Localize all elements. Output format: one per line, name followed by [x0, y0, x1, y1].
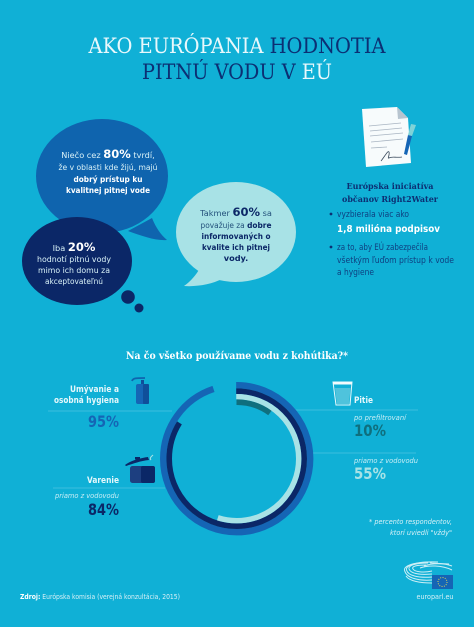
speech bubble: 20%: hodnotí pitnú vody [37, 254, 111, 264]
ring: drinking filtered 10% [180, 402, 293, 515]
speech bubble: 60%: informovaných o [202, 231, 271, 241]
text block: Right2Water bullets: vyzbierala viac ako [337, 209, 409, 219]
icon: glass of water [333, 382, 352, 405]
footnote: * percento respondentov, [369, 517, 452, 526]
speech bubble: 60%: Takmer 60% sa [199, 205, 272, 219]
footnote: ktorí uviedli "vždy" [390, 528, 452, 537]
logo: European Parliament [404, 562, 453, 589]
speech bubble: 20%: Iba 20% [53, 240, 96, 254]
chart heading: Na čo všetko používame vodu z kohútika?* [126, 351, 349, 362]
text block: Right2Water bullets: za to, aby EÚ zabezpečila [337, 241, 428, 252]
ring: washing 95% [163, 385, 310, 532]
speech bubble: 60%: vody. [224, 253, 248, 263]
flag [432, 575, 453, 589]
label: filtered 10% [353, 413, 407, 440]
label: washing: Umývanie a [70, 385, 119, 395]
label: tap 55%: priamo z vodovodu [353, 456, 418, 465]
label: washing [54, 385, 119, 431]
ring: cooking 84% [169, 391, 304, 526]
icon: cooking pot [125, 455, 155, 483]
icon: signed document and pen [362, 107, 416, 167]
speech bubble: 80%: kvalitnej pitnej vode [66, 185, 150, 195]
label: cooking [54, 476, 119, 519]
speech bubble: 20% [22, 217, 144, 312]
label: cooking: priamo z vodovodu [54, 491, 119, 500]
speech bubble: 80%: Niečo cez 80% tvrdí, [61, 147, 155, 161]
title: PITNÚ VODU V EÚ [142, 59, 332, 84]
website: europarl.eu [416, 593, 454, 601]
ring: drinking tap 55% [175, 397, 299, 521]
text block: Right2Water bullets [330, 209, 454, 277]
speech bubble: 60% [176, 182, 296, 286]
footnote [369, 517, 452, 537]
heading: Right2Water: občanov Right2Water [342, 194, 438, 205]
label: washing: 95% [88, 412, 119, 431]
text block: Right2Water bullets: 1,8 milióna podpisov [337, 223, 440, 235]
text block: Right2Water bullets: a hygiene [337, 267, 374, 277]
speech bubble: 80%: dobrý prístup ku [74, 174, 143, 184]
title: AKO EURÓPANIA HODNOTIA [88, 33, 386, 58]
title [88, 33, 386, 84]
speech bubble: 60%: považuje za dobre [200, 220, 272, 230]
radial chart: water use [163, 385, 310, 532]
icon: pump bottle [132, 378, 149, 404]
label: filtered 10%: 10% [354, 421, 386, 440]
speech bubble: 80% [36, 119, 168, 240]
label: tap 55% [353, 456, 418, 483]
speech bubble: 60%: kvalite ich pitnej [202, 242, 270, 252]
speech bubble: 80%: že v oblasti kde žijú, majú [58, 162, 158, 172]
source: Zdroj: Európska komisia (verejná konzultácia, 2015) [20, 593, 180, 601]
text block: Right2Water bullets: všetkým ľuďom prístup k vode [337, 255, 454, 265]
label: cooking: Varenie [87, 476, 119, 486]
label: washing: osobná hygiena [54, 396, 119, 406]
label: filtered 10%: po prefiltrovaní [353, 413, 407, 422]
heading: Right2Water: Európska iniciatíva [346, 181, 434, 192]
heading: Right2Water [342, 181, 438, 205]
label: drinking: Pitie [354, 396, 373, 406]
label: cooking: 84% [88, 500, 119, 519]
label: tap 55%: 55% [354, 464, 386, 483]
speech bubble: 20%: mimo ich domu za [38, 265, 110, 275]
speech bubble: 20%: akceptovateľnú [45, 276, 103, 286]
